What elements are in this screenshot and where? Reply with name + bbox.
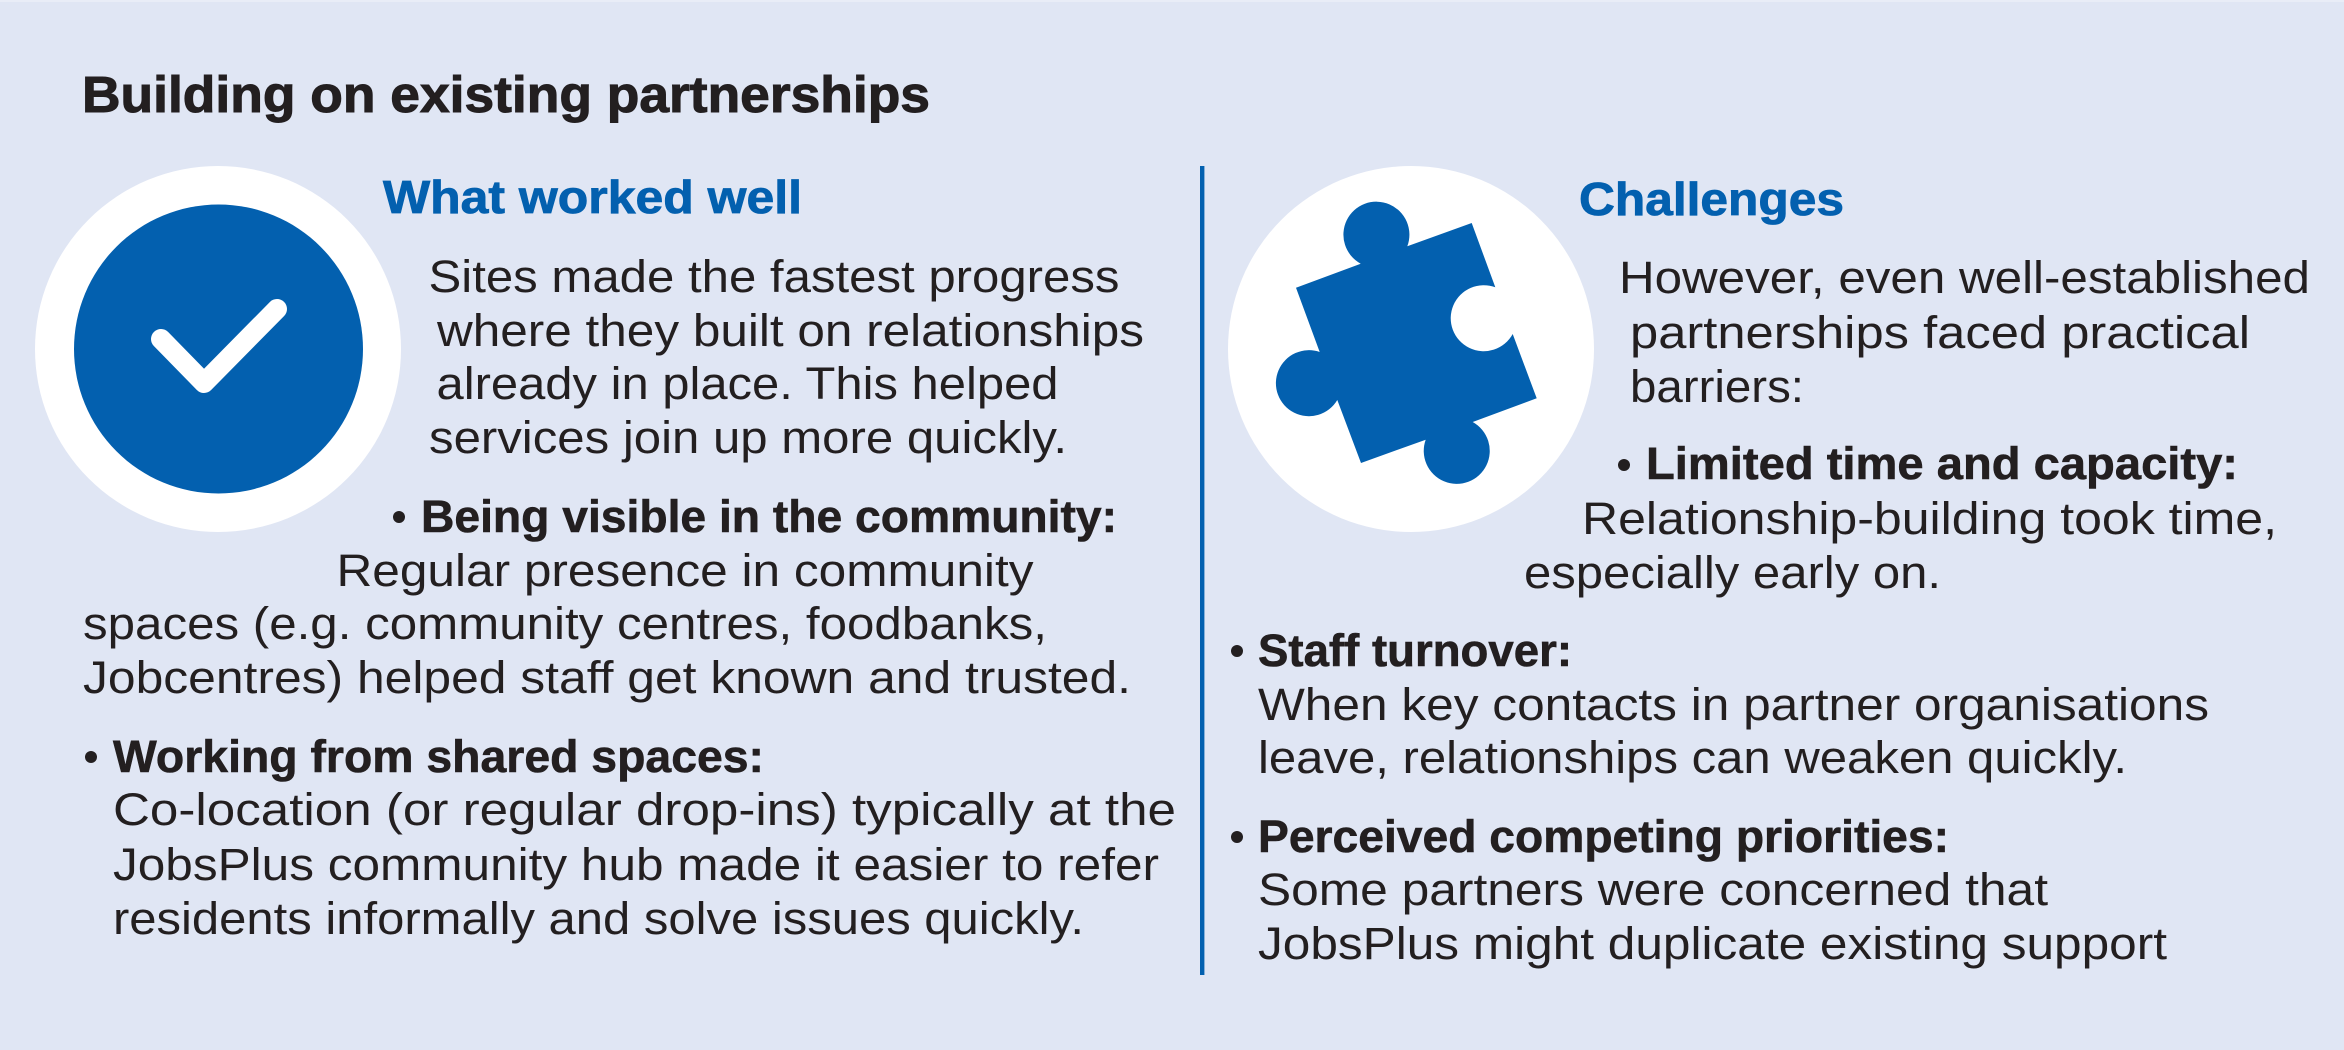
heading: challenges: Challenges bbox=[1579, 173, 1844, 225]
bullet: working from shared spaces: residents informally and solve issues quickly. bbox=[113, 893, 1084, 944]
bullet: working from shared spaces: JobsPlus community hub made it easier to refer bbox=[113, 839, 1159, 890]
bullet: limited time and capacity: Limited time and capacity: bbox=[1646, 438, 2238, 489]
bullet: limited time and capacity: especially early on. bbox=[1524, 547, 1941, 598]
bullet: limited time and capacity bbox=[1524, 438, 2277, 598]
bullet: perceived competing priorities: Some partners were concerned that bbox=[1258, 864, 2049, 915]
bullet: perceived competing priorities: JobsPlus might duplicate existing support bbox=[1258, 918, 2168, 969]
bullet: working from shared spaces: Working from shared spaces: bbox=[113, 731, 764, 782]
bullet: being visible in the community bbox=[83, 491, 1131, 703]
intro paragraph: However, even well-established bbox=[1619, 252, 2310, 303]
bullet: being visible in the community: Jobcentres) helped staff get known and trusted. bbox=[83, 652, 1131, 703]
icon: puzzle piece in circle bbox=[1228, 166, 1594, 532]
bullet: working from shared spaces bbox=[85, 731, 1176, 944]
intro paragraph: partnerships faced practical bbox=[1630, 307, 2250, 358]
bullet: limited time and capacity: Relationship-building took time, bbox=[1582, 493, 2277, 544]
bullet: staff turnover: Staff turnover: bbox=[1258, 625, 1572, 676]
icon: check mark in circle bbox=[35, 166, 401, 532]
title: Building on existing partnerships bbox=[82, 66, 930, 123]
panel: what worked well bbox=[35, 166, 1176, 944]
bullet: being visible in the community: spaces (e.g. community centres, foodbanks, bbox=[83, 598, 1047, 649]
bullet: working from shared spaces: Co-location (or regular drop-ins) typically at the bbox=[113, 784, 1176, 835]
intro paragraph bbox=[428, 251, 1144, 463]
heading: what worked well: What worked well bbox=[383, 171, 802, 223]
bullet: staff turnover: When key contacts in partner organisations bbox=[1258, 679, 2209, 730]
bullet: perceived competing priorities bbox=[1231, 811, 2168, 969]
intro paragraph: services join up more quickly. bbox=[429, 412, 1067, 463]
intro paragraph: already in place. This helped bbox=[436, 358, 1058, 409]
bullet: being visible in the community: Regular presence in community bbox=[336, 545, 1034, 596]
intro paragraph bbox=[1619, 252, 2310, 412]
panel: challenges bbox=[1228, 166, 2310, 969]
bullet: staff turnover bbox=[1231, 625, 2209, 783]
bullet: perceived competing priorities: Perceived competing priorities: bbox=[1258, 811, 1949, 862]
intro paragraph: Sites made the fastest progress bbox=[428, 251, 1120, 302]
bullet: staff turnover: leave, relationships can weaken quickly. bbox=[1258, 732, 2127, 783]
intro paragraph: where they built on relationships bbox=[436, 305, 1144, 356]
bullet: being visible in the community: Being visible in the community: bbox=[421, 491, 1117, 542]
intro paragraph: barriers: bbox=[1630, 361, 1804, 412]
